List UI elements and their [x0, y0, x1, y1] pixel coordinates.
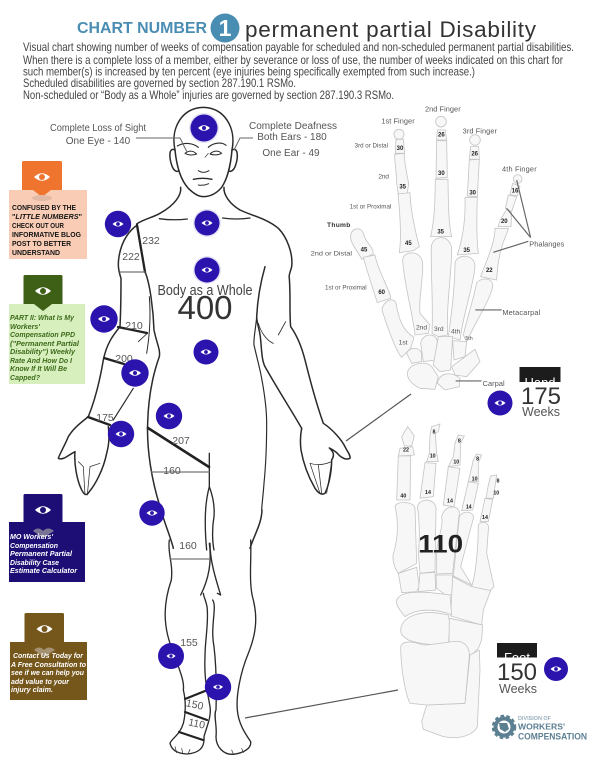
panel: little numbers callout: POST TO BETTER	[12, 239, 72, 248]
hand total: Hand	[524, 375, 556, 390]
body figure outline	[58, 107, 350, 754]
logo: division of workers' compensation: WORKERS'	[518, 722, 565, 732]
panel: part II callout: Rate And How Do I	[10, 356, 73, 365]
eye marker: chest	[193, 256, 221, 284]
panel: calculator callout: Compensation	[10, 541, 58, 550]
measurement lines	[88, 225, 210, 740]
eye marker: neck	[193, 209, 221, 237]
hand bone numbers: 26	[471, 152, 479, 158]
title	[77, 14, 537, 42]
foot bone numbers: 14	[447, 498, 453, 504]
panel: part II callout: ("Permanent Partial	[10, 339, 80, 348]
body part week numbers: 210	[125, 320, 143, 332]
foot bone numbers: 10	[430, 453, 436, 459]
eye marker: shoulder	[105, 211, 131, 237]
body as a whole label	[158, 283, 252, 326]
legs and feet	[165, 540, 256, 754]
hand labels: Phalanges	[529, 240, 565, 249]
hand labels: Metacarpal	[502, 308, 541, 317]
hand bone numbers: 22	[486, 268, 493, 274]
foot bone numbers: 14	[425, 490, 431, 496]
hand labels: 4th	[451, 329, 461, 336]
hand total: 175	[521, 383, 561, 410]
eye marker: forearm	[121, 359, 149, 387]
eye marker: thigh	[139, 500, 165, 526]
hand labels: 3rd or Distal	[355, 143, 388, 150]
hand bone numbers: 20	[501, 219, 508, 225]
foot bone numbers: 8	[476, 456, 479, 462]
panel: part II callout: Capped?	[10, 373, 40, 382]
foot total: Weeks	[499, 682, 537, 696]
body as a whole label: 400	[177, 289, 233, 326]
hand labels	[311, 105, 565, 388]
sight and hearing callouts: Complete Deafness	[249, 121, 337, 132]
intro text block	[23, 40, 574, 102]
sight and hearing callouts: One Ear - 49	[262, 148, 320, 159]
hand bone numbers: 35	[437, 229, 445, 235]
panel: little numbers callout: CHECK OUT OUR	[12, 221, 64, 230]
hand labels: Carpal	[483, 379, 505, 388]
panel: contact callout: see if we can help you	[11, 668, 84, 677]
eye marker: hip	[156, 403, 182, 429]
hand bone numbers: 30	[397, 146, 404, 152]
body part week numbers	[96, 235, 206, 732]
hand labels: 1st or Proximal	[350, 204, 392, 211]
hand labels: 3rd Finger	[463, 127, 498, 136]
hand labels: 2nd	[416, 324, 427, 331]
panel: calculator callout: Estimate Calculator	[10, 566, 78, 575]
body part week numbers: 160	[179, 540, 197, 552]
foot bone numbers: 40	[400, 493, 406, 499]
panel: contact callout: injury claim.	[11, 685, 53, 694]
body part week numbers: 222	[122, 251, 140, 263]
hand bone numbers: 16	[512, 189, 519, 195]
logo: division of workers' compensation	[493, 716, 587, 742]
hand total	[515, 367, 565, 419]
panel: calculator callout: MO Workers'	[10, 532, 53, 541]
foot skeleton diagram	[393, 424, 500, 738]
hand labels: Thumb	[327, 222, 350, 229]
foot bone numbers: 10	[472, 476, 478, 482]
hand bone numbers: 30	[438, 171, 445, 177]
panel: contact callout: add value to your	[11, 677, 70, 686]
hand labels: 2nd	[378, 173, 389, 180]
panel: contact callout	[10, 613, 87, 700]
left arm and left torso	[58, 225, 160, 507]
body part week numbers: 175	[96, 412, 114, 424]
body part week numbers: 150	[185, 697, 205, 713]
hand labels: 4th Finger	[502, 165, 537, 174]
hand labels: 5th	[465, 336, 473, 342]
connector lines to hand and foot	[245, 394, 411, 718]
panel: calculator callout: Permanent Partial	[10, 549, 73, 558]
hand labels: 3rd	[434, 326, 444, 333]
eye marker: calf	[158, 643, 184, 669]
logo: division of workers' compensation: DIVISION OF	[518, 716, 552, 722]
panel: little numbers callout: "LITTLE NUMBERS"	[12, 212, 82, 221]
hand skeleton diagram	[311, 105, 565, 390]
intro text block: Non-scheduled or “Body as a Whole” injuries are governed by section 287.190.3 RSMo.	[23, 88, 394, 102]
hand labels: 1st Finger	[381, 116, 415, 125]
eye marker: abdomen	[194, 340, 218, 364]
foot bone numbers: 8	[458, 438, 461, 444]
panel: little numbers callout: CONFUSED BY THE	[12, 203, 76, 212]
foot bone numbers: 14	[482, 515, 488, 521]
hand pointer lines	[456, 180, 531, 381]
foot total	[492, 643, 542, 696]
foot total number: 110	[418, 531, 463, 559]
panel: part II callout	[9, 275, 85, 384]
eye marker: foot	[544, 657, 568, 681]
foot bone numbers: 8	[433, 430, 436, 436]
hand total: Weeks	[522, 405, 560, 419]
eye markers	[90, 113, 568, 700]
sight and hearing callouts	[50, 121, 337, 159]
body part week numbers: 207	[172, 435, 190, 447]
panel: part II callout: Compensation PPD	[10, 330, 76, 339]
foot bone numbers	[400, 430, 500, 521]
eye marker: ankle	[205, 674, 231, 700]
eye marker: head	[189, 113, 219, 143]
panel: part II callout: Disability") Weekly	[10, 347, 76, 356]
hand labels: 2nd Finger	[425, 105, 461, 114]
hand bone numbers: 30	[469, 190, 477, 196]
sight and hearing callouts: Complete Loss of Sight	[50, 123, 146, 134]
body part week numbers: 200	[115, 353, 133, 365]
eye marker: wrist	[108, 421, 134, 447]
title: CHART NUMBER	[77, 20, 207, 37]
panel: contact callout: A Free Consultation to	[10, 660, 86, 669]
hand labels: 2nd or Distal	[311, 250, 353, 257]
foot bone numbers: 10	[453, 460, 459, 466]
foot bone numbers: 10	[493, 490, 499, 496]
hand bone numbers	[361, 133, 519, 296]
foot bone numbers: 14	[466, 504, 472, 510]
sight and hearing callouts: One Eye - 140	[66, 136, 131, 147]
hand bone numbers: 60	[378, 290, 386, 296]
panel: part II callout: PART II: What Is My	[10, 313, 75, 322]
eye marker: upper arm	[90, 305, 118, 333]
foot bone numbers: 22	[403, 447, 409, 453]
intro text block: Scheduled disabilities are governed by section 287.190.1 RSMo.	[23, 76, 296, 90]
sight and hearing callouts: Both Ears - 180	[257, 132, 327, 143]
eye marker: hand	[488, 390, 512, 416]
body part week numbers: 155	[180, 637, 198, 649]
title: permanent partial Disability	[245, 17, 537, 42]
right arm and right torso	[240, 210, 350, 510]
head and neck	[137, 107, 250, 224]
panel: contact callout: Contact Us Today for	[13, 651, 84, 660]
hand bone numbers: 45	[361, 248, 368, 254]
body part week numbers: 110	[187, 716, 206, 732]
hand bone numbers: 45	[405, 241, 412, 247]
body as a whole label: Body as a Whole	[158, 283, 252, 299]
hand bone numbers: 35	[463, 248, 471, 254]
title: 1	[219, 15, 232, 41]
panel: part II callout: Know If It Will Be	[10, 364, 67, 373]
lower torso and upper thighs	[160, 453, 262, 550]
hand labels: 1st or Proximal	[325, 285, 367, 292]
foot total: Foot	[504, 650, 530, 665]
logo: division of workers' compensation: COMPENSATION	[518, 732, 587, 742]
intro text block: such member(s) is increased by ten percent (eye injuries being specifically exempted from such increase.)	[23, 64, 475, 78]
hand bone numbers: 26	[438, 133, 445, 139]
panel: calculator callout	[9, 494, 85, 582]
panel: calculator callout: Disability Case	[10, 558, 59, 567]
panel: little numbers callout	[9, 161, 87, 259]
panel: part II callout: Workers'	[10, 322, 40, 331]
panel: little numbers callout: UNDERSTAND	[12, 248, 61, 257]
body part week numbers: 160	[163, 465, 181, 477]
panel: little numbers callout: INFORMATIVE BLOG	[12, 230, 81, 239]
hand labels: 1st	[399, 340, 408, 347]
foot total: 150	[497, 659, 537, 686]
body part week numbers: 232	[142, 235, 160, 247]
hand bone numbers: 35	[399, 185, 407, 191]
foot bone numbers: 8	[497, 479, 500, 485]
